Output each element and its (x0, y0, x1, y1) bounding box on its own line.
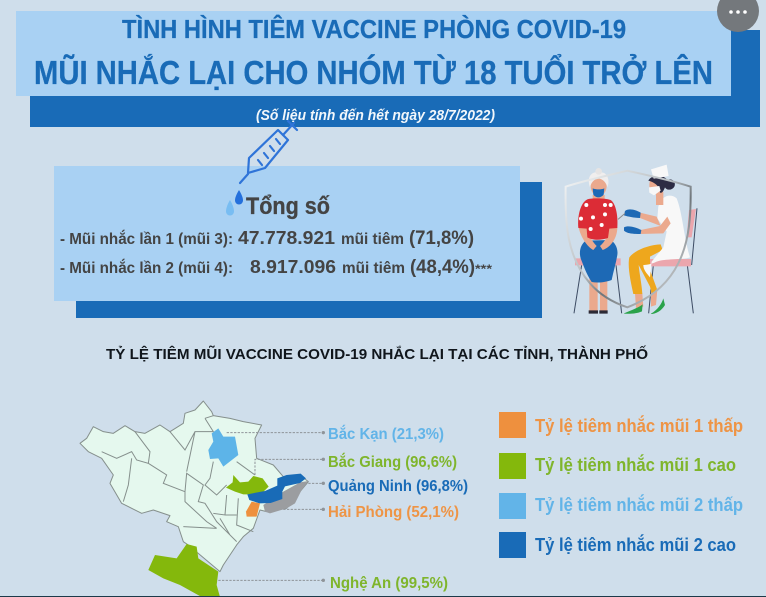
nurse (618, 165, 690, 314)
panel heading: Tổng số (246, 193, 330, 220)
booster dose 2 row: 8.917.096 (250, 257, 336, 277)
leader lines (218, 433, 323, 580)
map labels: Nghệ An (99,5%) (330, 575, 448, 592)
header banner (16, 11, 760, 127)
province: Bắc Giang (226, 475, 269, 494)
legend: Tỷ lệ tiêm nhắc mũi 2 thấp (535, 494, 743, 515)
province: Bắc Kạn (208, 428, 238, 467)
section heading: TỶ LỆ TIÊM MŨI VACCINE COVID-19 NHẮC LẠI TẠI CÁC TỈNH, THÀNH PHỐ (106, 345, 648, 363)
shield outline (566, 171, 691, 307)
district borders (102, 416, 255, 542)
legend (499, 412, 743, 558)
chairs (574, 208, 697, 313)
booster dose 2 row: mũi tiêm (342, 260, 405, 277)
map base (80, 401, 308, 572)
gray islands (263, 481, 308, 513)
icon: dark water drop (235, 190, 243, 204)
province: Quảng Ninh (247, 474, 306, 503)
illustration: nurse vaccinating patient (566, 165, 697, 314)
booster dose 2 row: (48,4%) (410, 257, 475, 278)
panel: totals (54, 166, 542, 318)
booster dose 1 row (60, 228, 474, 249)
legend: Tỷ lệ tiêm nhắc mũi 2 cao (535, 534, 736, 555)
map labels: Hải Phòng (52,1%) (328, 504, 459, 521)
map labels: Quảng Ninh (96,8%) (328, 478, 468, 495)
title line 1: TÌNH HÌNH TIÊM VACCINE PHÒNG COVID-19 (122, 14, 626, 44)
booster dose 1 row: - Mũi nhắc lần 1 (mũi 3): (60, 229, 233, 248)
map labels (328, 424, 468, 592)
booster dose 1 row: (71,8%) (409, 228, 474, 249)
legend: Tỷ lệ tiêm nhắc mũi 1 cao (535, 454, 736, 475)
map labels: Bắc Kạn (21,3%) (328, 424, 444, 443)
map: northern Vietnam provinces (80, 401, 325, 597)
province: Hải Phòng (246, 502, 260, 517)
legend: Tỷ lệ tiêm nhắc mũi 1 thấp (535, 415, 743, 436)
date note: (Số liệu tính đến hết ngày 28/7/2022) (256, 107, 495, 124)
map labels: Bắc Giang (96,6%) (328, 452, 457, 471)
booster dose 1 row: 47.778.921 (238, 228, 335, 248)
more options button (717, 0, 759, 32)
booster dose 2 row: - Mũi nhắc lần 2 (mũi 4): (60, 258, 233, 277)
province: Nghệ An (148, 544, 220, 597)
icon: light water drop (226, 200, 234, 216)
booster dose 2 row: *** (475, 262, 492, 276)
booster dose 1 row: mũi tiêm (341, 231, 404, 248)
icon: syringe (240, 121, 297, 183)
booster dose 2 row (60, 257, 492, 278)
patient (578, 168, 618, 314)
